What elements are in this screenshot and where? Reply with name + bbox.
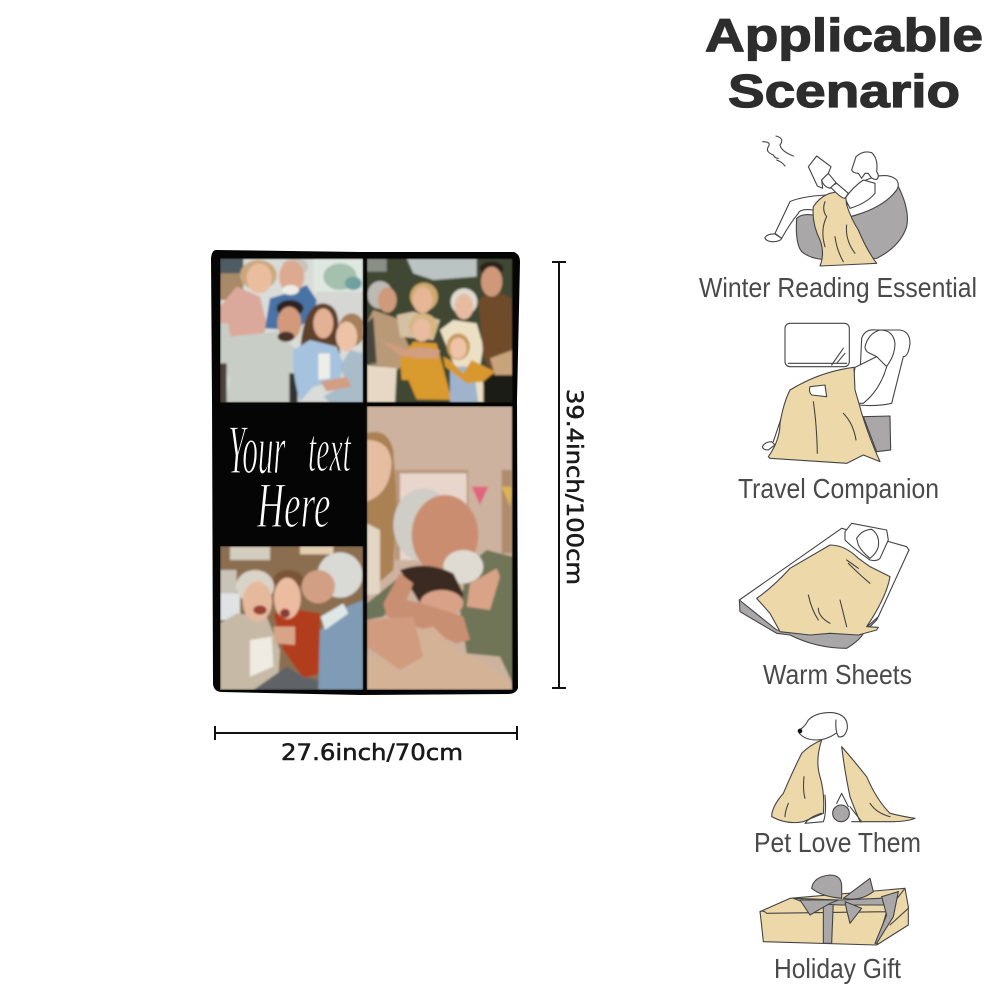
icon: travel companion <box>762 323 910 463</box>
dimension: width <box>215 726 517 766</box>
label: Holiday Gift: Holiday Gift <box>774 953 901 984</box>
photo: family outdoors <box>367 258 513 403</box>
label: Pet Love Them: Pet Love Them <box>754 827 921 858</box>
custom text: Your text Here: Here <box>256 471 330 542</box>
blanket product <box>211 250 520 695</box>
custom text: Your text Here: Your <box>228 411 286 489</box>
label: Travel Companion: Travel Companion <box>738 473 939 504</box>
title <box>705 9 983 117</box>
dimension: height: 39.4inch/100cm <box>561 389 586 585</box>
photo: grandparents with child <box>220 546 363 690</box>
dimension: height <box>552 262 586 688</box>
icon: winter reading <box>763 136 907 266</box>
photo: embrace portrait <box>367 406 513 690</box>
title: Applicable <box>705 9 983 61</box>
custom text: Your text Here: text <box>308 415 352 485</box>
icon: holiday gift <box>760 875 908 945</box>
custom text: Your text Here <box>228 411 352 542</box>
title: Scenario <box>728 65 960 117</box>
icon: pet love <box>772 713 915 823</box>
dimension: width: 27.6inch/70cm <box>281 741 463 766</box>
photo: family selfie <box>220 258 365 403</box>
blanket black base <box>211 250 520 695</box>
icon: warm sheets <box>739 523 909 648</box>
label: Warm Sheets: Warm Sheets <box>763 659 912 690</box>
